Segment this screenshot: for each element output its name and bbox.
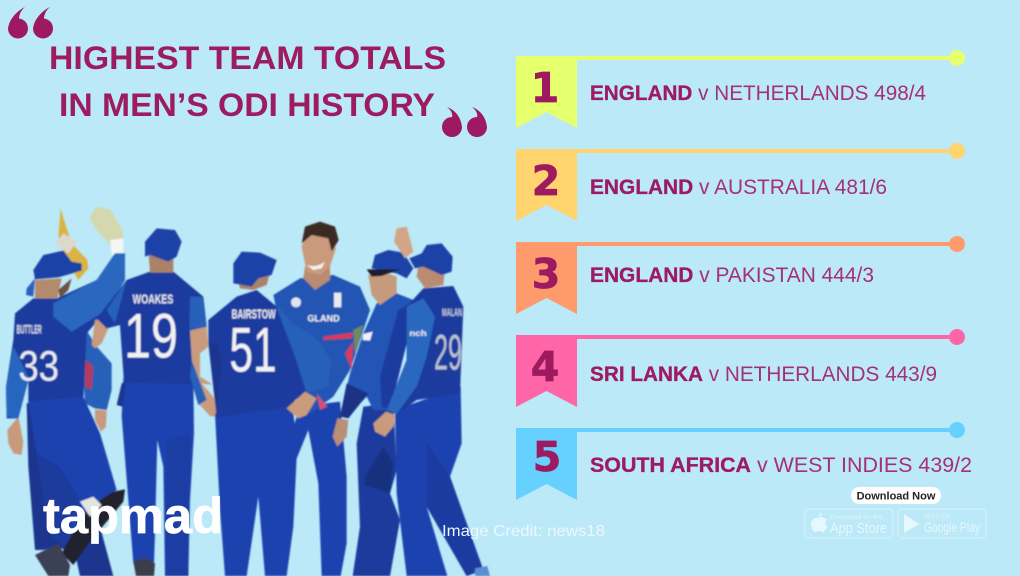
player: Woakes number 19: WOAKES xyxy=(133,291,173,306)
download now button: Download Now xyxy=(857,490,936,502)
ranking item 1: 1 xyxy=(531,64,559,112)
player: bowler celebrating in England shirt xyxy=(267,222,370,576)
title xyxy=(49,40,446,123)
image credit: Image Credit: news18 xyxy=(442,523,605,540)
player: fielder behind wicketkeeper and wicketkeeper with number 33 xyxy=(6,207,125,576)
team photo: England players huddle xyxy=(6,207,490,576)
ranking item 2: ENGLAND v AUSTRALIA 481/6 xyxy=(590,176,887,199)
player: Woakes number 19 xyxy=(92,228,223,576)
ranking item 4: SRI LANKA v NETHERLANDS 443/9 xyxy=(590,363,937,386)
player: Bairstow number 51: 51 xyxy=(229,315,277,385)
title: IN MEN’S ODI HISTORY xyxy=(59,87,435,123)
ranking item 3 xyxy=(516,236,965,314)
player: fielder behind wicketkeeper and wicketkeeper with number 33: BUTTLER xyxy=(17,322,42,336)
ranking item 4 xyxy=(516,329,965,407)
download now button xyxy=(851,487,941,504)
player: fielder number 29 Malan: nch xyxy=(409,328,427,338)
ranking item 5: 5 xyxy=(533,433,561,481)
app store badge: Download on the xyxy=(830,514,883,521)
player: Bairstow number 51: BAIRSTOW xyxy=(232,307,276,321)
ranking item 5: SOUTH AFRICA v WEST INDIES 439/2 xyxy=(590,454,972,477)
title: HIGHEST TEAM TOTALS xyxy=(49,40,446,76)
ranking item 1: ENGLAND v NETHERLANDS 498/4 xyxy=(590,82,926,105)
ranking item 3: ENGLAND v PAKISTAN 444/3 xyxy=(590,264,874,287)
player: Woakes number 19: 19 xyxy=(124,301,178,371)
ranking item 3: 3 xyxy=(532,250,560,298)
google play badge xyxy=(898,509,986,538)
app store badge xyxy=(805,509,893,538)
ranking item 1 xyxy=(516,50,965,128)
app store badge: App Store xyxy=(830,521,887,537)
logo: tapmad: tapmad xyxy=(43,488,223,544)
ranking item 4: 4 xyxy=(531,343,559,391)
player: fielder number 29 Malan: MALAN xyxy=(442,307,462,319)
icon: opening quote marks xyxy=(8,7,53,38)
ranking item 2 xyxy=(516,143,965,221)
ranking item 2: 2 xyxy=(532,157,560,205)
player: fielder behind wicketkeeper and wicketkeeper with number 33: 33 xyxy=(18,343,59,391)
player: fielder number 29 Malan xyxy=(373,227,490,576)
player: bowler celebrating in England shirt: GLAND xyxy=(307,313,340,323)
ranking item 5 xyxy=(516,422,972,500)
google play badge: Google Play xyxy=(924,520,980,535)
player: fielder in sunglasses xyxy=(333,250,413,576)
icon: closing quote marks xyxy=(442,107,487,137)
player: fielder number 29 Malan: 29 xyxy=(434,324,462,380)
google play badge: GET IT ON xyxy=(924,514,950,520)
player: Bairstow number 51 xyxy=(208,252,332,576)
